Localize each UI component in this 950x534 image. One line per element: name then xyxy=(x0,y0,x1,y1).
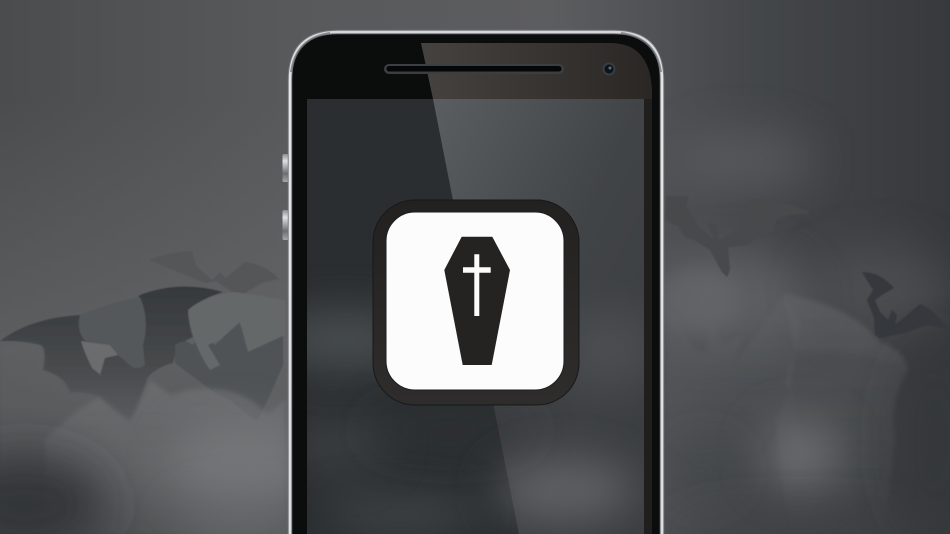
phone metal frame xyxy=(290,32,662,534)
bat: faint mid right xyxy=(733,322,794,403)
bat: large right wing xyxy=(778,298,907,442)
side button: upper xyxy=(282,154,289,182)
cross xyxy=(463,254,491,316)
pale wing curls xyxy=(81,341,118,376)
speaker xyxy=(384,64,564,74)
bat: small far right xyxy=(862,272,946,338)
phone front bezel xyxy=(294,36,658,534)
bat: small top left xyxy=(149,251,279,295)
camera xyxy=(602,62,616,76)
left fog clouds xyxy=(0,383,288,534)
phone xyxy=(270,32,662,534)
coffin xyxy=(444,237,510,365)
right bats xyxy=(666,196,946,338)
app icon xyxy=(373,200,579,405)
bat: top right xyxy=(666,196,811,277)
frame corner shading xyxy=(291,33,661,72)
right bezel band xyxy=(644,99,652,534)
screen xyxy=(307,99,644,534)
bezel glare xyxy=(421,43,652,99)
icon frame xyxy=(373,200,579,405)
icon white tile xyxy=(386,212,564,390)
bat: large dark left xyxy=(0,287,223,422)
right fog glows xyxy=(660,268,740,332)
side button: lower xyxy=(282,210,289,240)
screen glare xyxy=(433,99,644,534)
screen fog xyxy=(270,310,660,534)
left bats xyxy=(0,251,285,422)
bat: mid grey overlapping wing xyxy=(79,297,146,368)
bat: right dark body xyxy=(175,322,283,420)
right fog bats xyxy=(733,298,906,504)
